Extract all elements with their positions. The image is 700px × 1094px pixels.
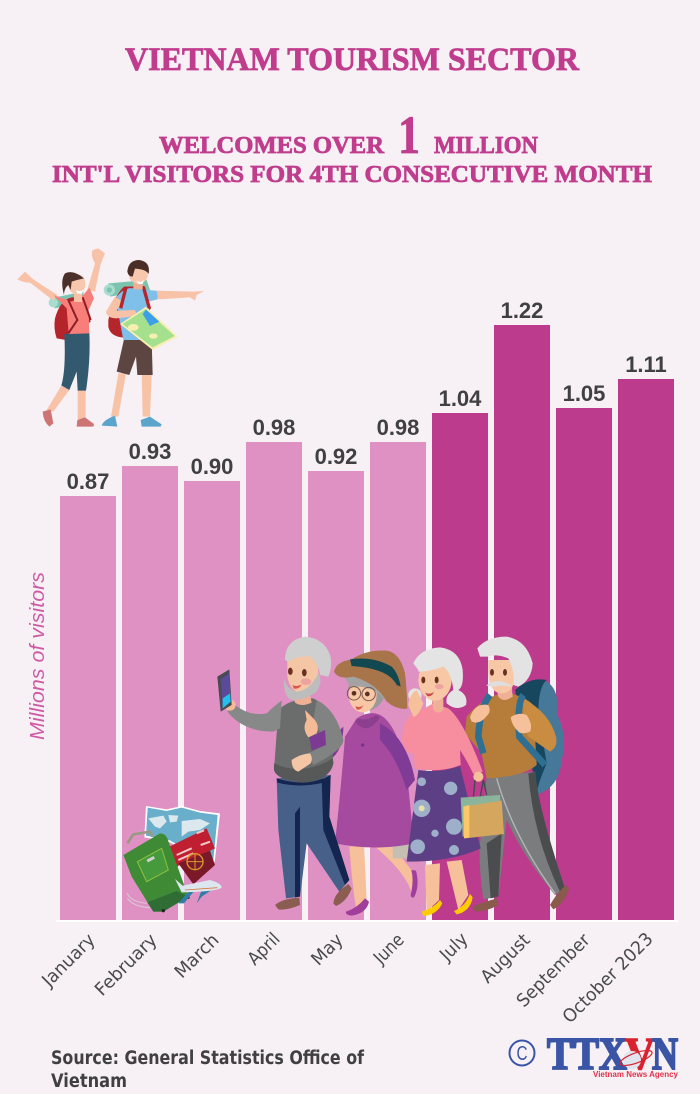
illustration: luggage, map, tickets and plane xyxy=(123,806,222,912)
month labels: October 2023 xyxy=(559,929,658,1028)
woman tourist xyxy=(17,248,105,427)
bar: June xyxy=(370,415,426,920)
illustration: elderly couple with bags and backpack xyxy=(402,637,569,916)
month labels: June xyxy=(369,930,409,969)
bar: July: 1.04 xyxy=(439,386,482,411)
illustration: young tourists xyxy=(17,248,204,427)
title: VIETNAM TOURISM SECTOR xyxy=(125,42,580,78)
logo: TTXVN: TTX xyxy=(547,1028,627,1079)
month labels: August xyxy=(477,930,535,988)
old woman in pink sweater xyxy=(402,647,504,916)
bar: March xyxy=(184,454,240,920)
month labels xyxy=(37,928,658,1028)
bar: August xyxy=(494,298,550,920)
logo: TTXVN: N xyxy=(652,1028,678,1079)
copyright symbol: C xyxy=(516,1043,528,1065)
bar: April: 0.98 xyxy=(253,415,295,440)
bar: August: 1.22 xyxy=(501,298,543,323)
subtitle xyxy=(52,105,652,188)
man tourist xyxy=(102,260,204,427)
logo: TTXVN: V xyxy=(625,1028,655,1079)
bar: January: 0.87 xyxy=(67,469,109,494)
bar chart xyxy=(56,298,678,922)
subtitle: INT'L VISITORS FOR 4TH CONSECUTIVE MONTH xyxy=(52,161,652,188)
month labels: February xyxy=(91,929,162,1000)
subtitle: WELCOMES OVER xyxy=(159,132,384,159)
bar: June: 0.98 xyxy=(377,415,419,440)
month labels: May xyxy=(307,929,348,970)
axis label: Millions of visitors xyxy=(27,572,49,740)
bar: July xyxy=(432,386,488,920)
bar: May: 0.92 xyxy=(315,444,357,469)
illustration: elderly couple with phone and hat xyxy=(217,637,418,916)
source note: Source: General Statistics Office of xyxy=(51,1048,365,1069)
logo: TTXVN: Vietnam News Agency xyxy=(593,1069,678,1079)
month labels: July xyxy=(435,928,473,966)
month labels: January xyxy=(37,929,100,992)
subtitle: 1 xyxy=(398,105,420,165)
bar: September xyxy=(556,381,612,920)
bar: January xyxy=(60,469,116,920)
month labels: April xyxy=(244,929,285,970)
bar: March: 0.90 xyxy=(191,454,233,479)
month labels: March xyxy=(171,930,224,983)
subtitle: MILLION xyxy=(434,132,538,159)
source note: Vietnam xyxy=(51,1071,127,1092)
bar: February xyxy=(122,439,178,920)
bar: September: 1.05 xyxy=(563,381,605,406)
bar: October 2023 xyxy=(618,352,674,920)
bar: February: 0.93 xyxy=(129,439,171,464)
bar: May xyxy=(308,444,364,920)
month labels: September xyxy=(513,929,595,1012)
old man with phone xyxy=(217,637,352,910)
copyright symbol xyxy=(510,1040,534,1066)
bar: October 2023: 1.11 xyxy=(625,352,667,377)
old man with backpack xyxy=(465,637,569,912)
source note xyxy=(51,1048,365,1092)
old woman in purple dress xyxy=(309,651,418,916)
bar: April xyxy=(246,415,302,920)
